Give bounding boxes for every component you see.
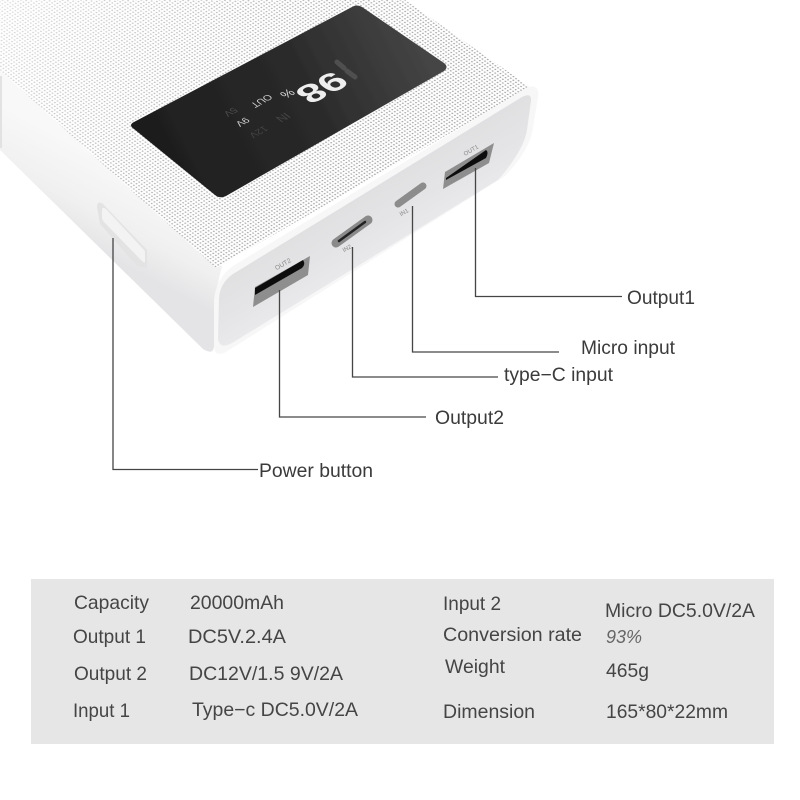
OUT label: OUT bbox=[247, 92, 275, 109]
port: micro input bbox=[398, 186, 423, 218]
callout: type-C input: type−C input bbox=[504, 365, 614, 386]
callout: Power button bbox=[113, 238, 373, 482]
left column specs: 20000mAh bbox=[190, 592, 284, 614]
callout: Output2: Output2 bbox=[435, 408, 504, 429]
left column specs: Input 1 bbox=[73, 700, 130, 722]
left column specs: Type−c DC5.0V/2A bbox=[192, 699, 358, 721]
right column specs: Input 2 bbox=[443, 593, 501, 615]
port: type-C input: IN2 bbox=[342, 244, 354, 254]
power bank device bbox=[0, 0, 538, 354]
port: output 1: OUT1 bbox=[463, 144, 480, 158]
top face with dot texture bbox=[0, 0, 530, 268]
side face bbox=[0, 70, 222, 352]
callout: Micro input: Micro input bbox=[581, 338, 676, 359]
right column specs: 165*80*22mm bbox=[606, 701, 728, 723]
right column specs: Dimension bbox=[443, 701, 535, 723]
left column specs: DC5V.2.4A bbox=[188, 626, 286, 648]
percent sign: % bbox=[277, 86, 299, 101]
left column specs: Output 2 bbox=[74, 663, 147, 685]
left edge shade bbox=[0, 76, 2, 148]
callout: Power button: Power button bbox=[259, 461, 373, 482]
right column specs bbox=[443, 593, 755, 723]
right column specs: 465g bbox=[606, 660, 649, 682]
display digits: 98 bbox=[287, 66, 356, 109]
callout: type-C input bbox=[352, 247, 614, 386]
left column specs: DC12V/1.5 9V/2A bbox=[189, 663, 343, 685]
port: output 2: OUT2 bbox=[274, 257, 293, 272]
port: micro input: IN1 bbox=[399, 208, 411, 218]
5V label: 5V bbox=[220, 105, 240, 118]
IN label: IN bbox=[272, 110, 294, 124]
right column specs: Weight bbox=[445, 656, 506, 678]
front face bbox=[214, 86, 538, 354]
callout: Output1: Output1 bbox=[627, 288, 695, 309]
left column specs bbox=[73, 592, 358, 722]
9V label: 9V bbox=[232, 115, 252, 128]
port: output 2 bbox=[253, 256, 310, 307]
specification panel bbox=[31, 579, 774, 744]
12V label: 12V bbox=[246, 124, 270, 139]
left column specs: Capacity bbox=[74, 592, 149, 614]
right column specs: Micro DC5.0V/2A bbox=[605, 600, 755, 622]
callout: Output1 bbox=[476, 168, 695, 309]
port: type-C input bbox=[336, 220, 368, 254]
display screen bbox=[131, 6, 446, 197]
left column specs: Output 1 bbox=[73, 626, 146, 648]
right column specs: Conversion rate bbox=[443, 624, 582, 646]
callout: Output2 bbox=[280, 290, 504, 429]
callout: Micro input bbox=[412, 206, 676, 359]
power button bbox=[97, 203, 147, 268]
inactive segments bbox=[337, 62, 355, 77]
right column specs: 93% bbox=[606, 627, 642, 647]
port: output 1 bbox=[443, 143, 494, 189]
